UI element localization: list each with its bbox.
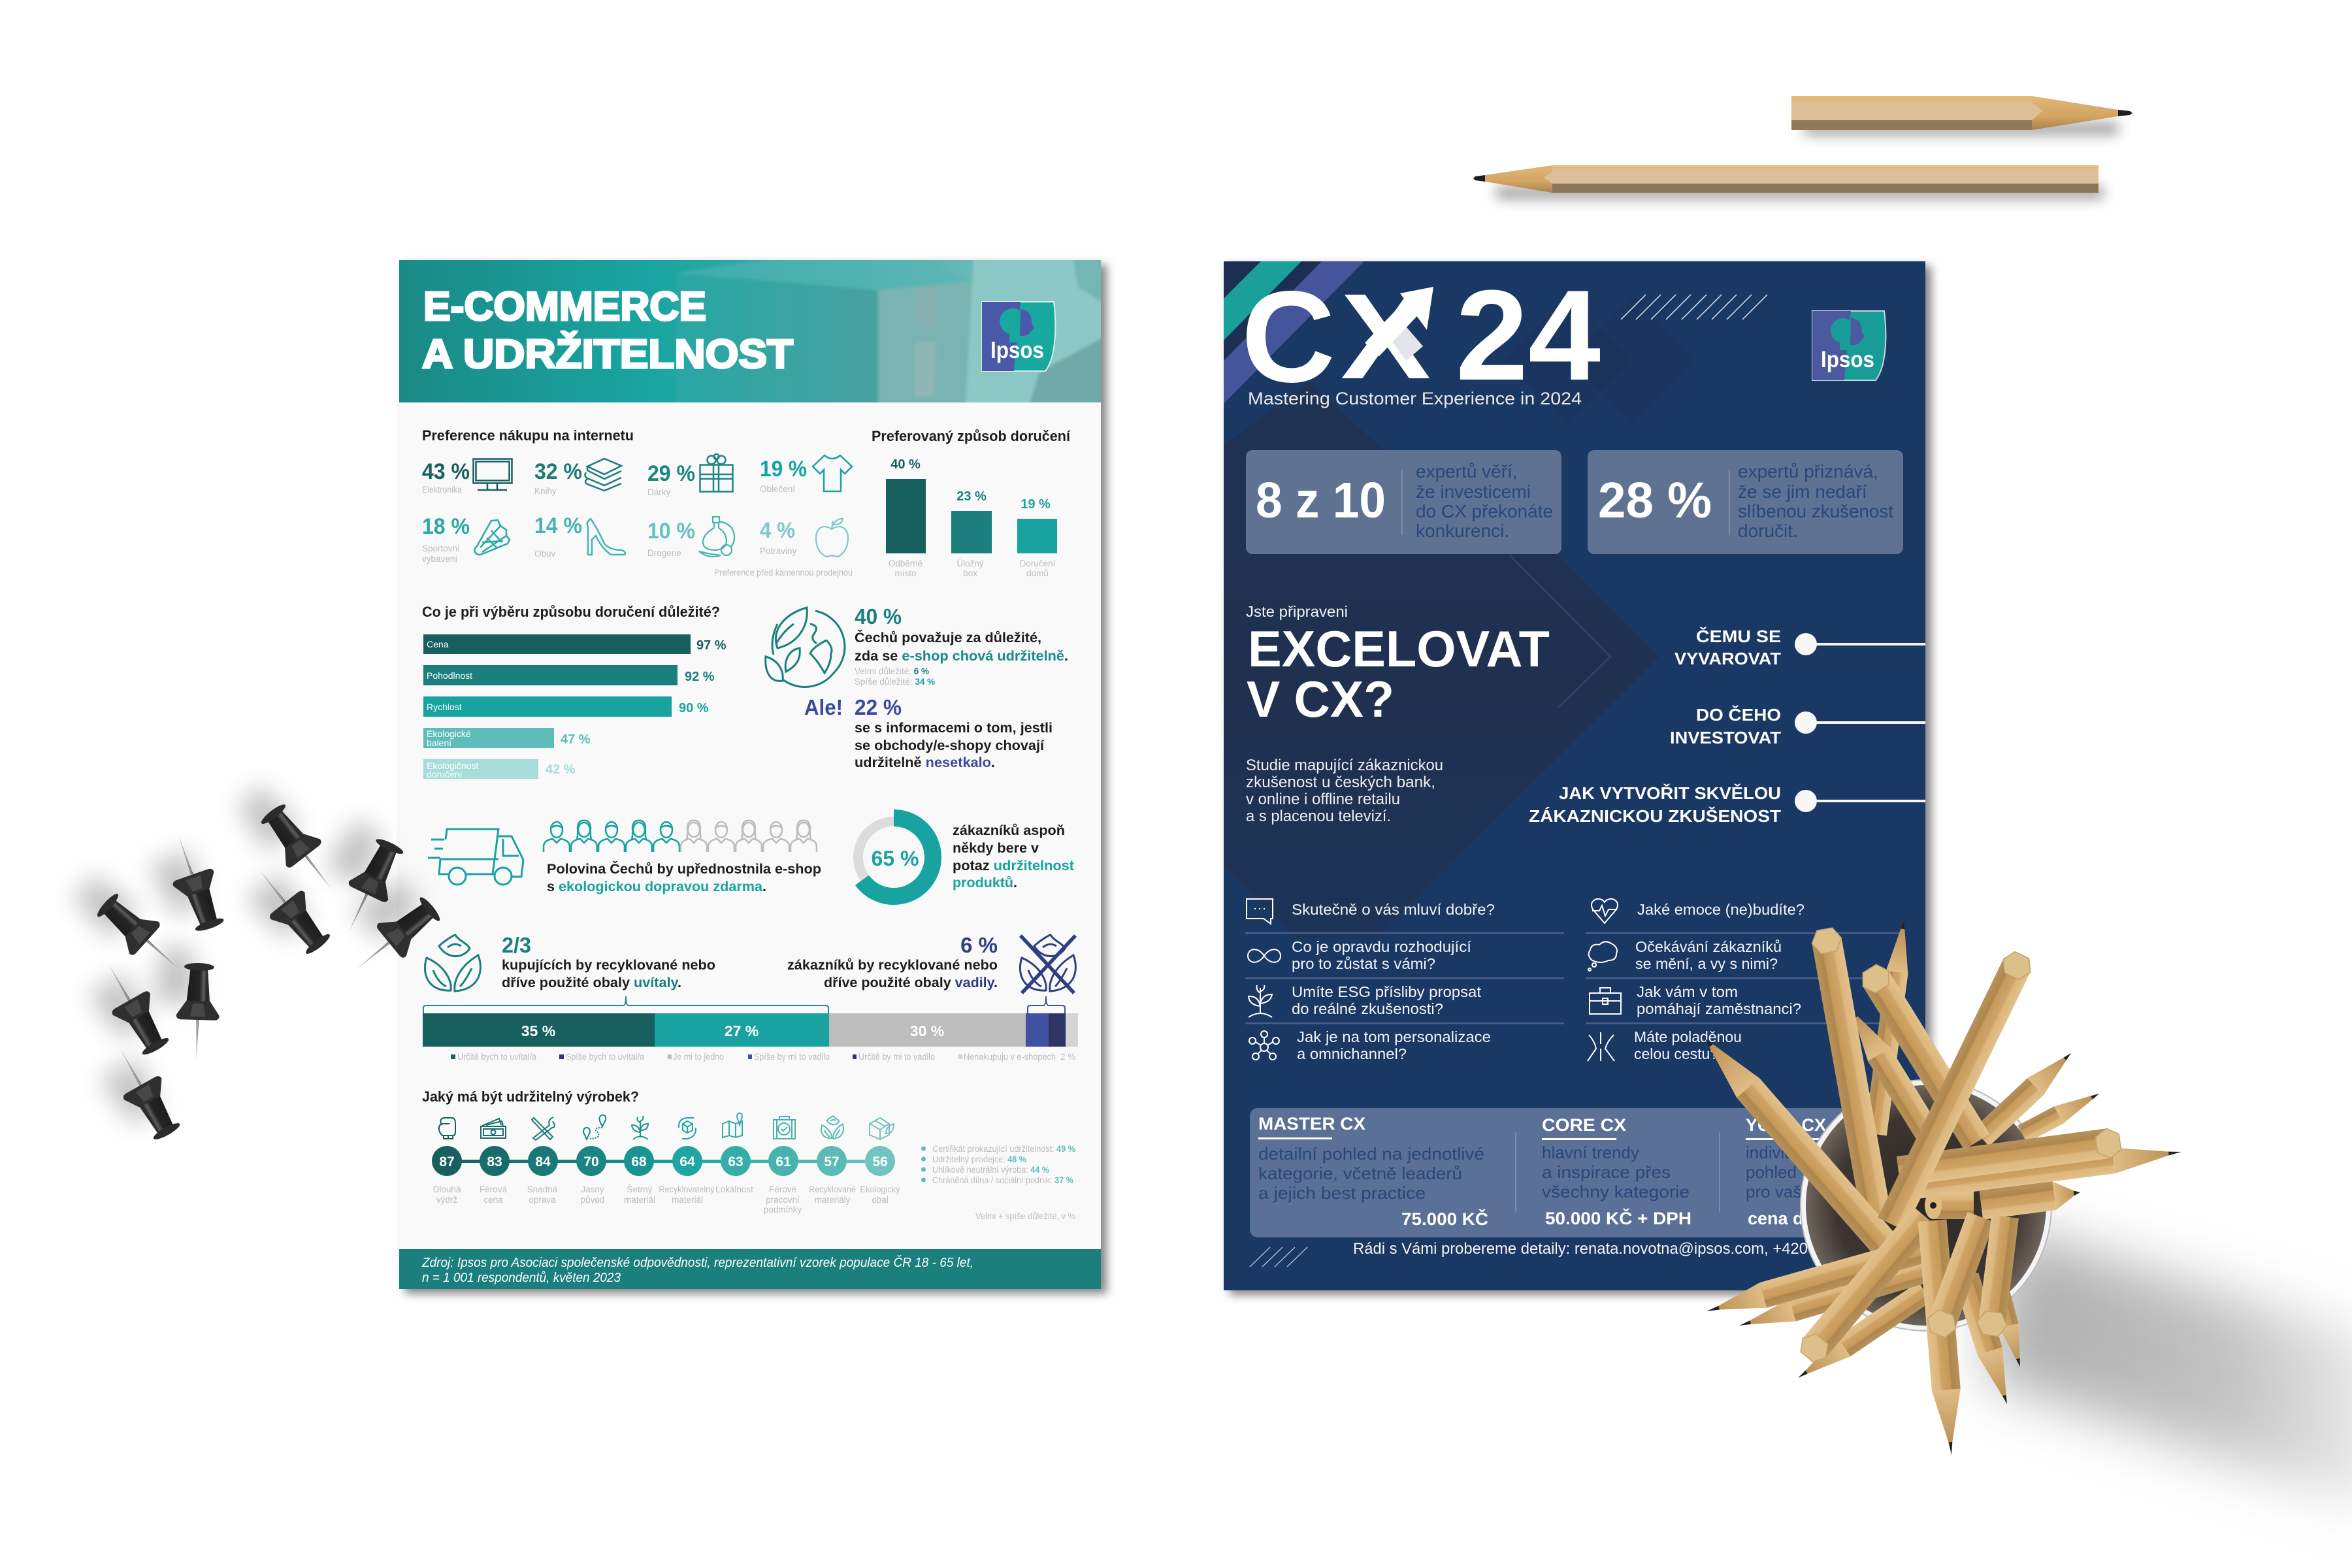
icon: crossed recycle [1020,935,1075,993]
timeline labels [433,1184,900,1215]
card: 8 z 10: konkurenci. [1416,521,1509,541]
icon: shuttlecock [474,520,510,555]
title: CX 24: C [1241,265,1335,410]
text block: polovina Čechů: s ekologickou dopravou zdarma . [547,879,766,894]
stat: elektronika [422,459,512,495]
legend: Určitě by mi to vadilo [858,1052,935,1062]
icon: map [723,1113,742,1137]
bar chart: způsob doručení: domů [1026,568,1049,578]
title: A UDRŽITELNOST [422,332,793,377]
donut chart: 65 % [855,818,933,896]
card: 8 z 10: do CX překonáte [1416,501,1553,521]
text block: zákazníků aspoň: zákazníků aspoň [953,823,1065,838]
timeline labels: oprava [529,1195,556,1205]
timeline: circles with values: 70 [583,1154,599,1169]
timeline: circles with values: 84 [535,1154,551,1169]
icon row: product attributes [439,1113,894,1140]
tier: core cx: všechny kategorie [1542,1182,1690,1201]
heading: excelovat v CX [1246,603,1550,728]
stat: potraviny: 4 % [760,518,795,543]
pin 4 [69,870,192,984]
note: velmi + spíše důležité: Velmi + spíše důležité, v % [975,1211,1075,1221]
question list: do reálné zkušenosti? [1292,1000,1443,1017]
stat: drogerie: Drogerie [647,548,681,558]
icon: high heel [587,519,625,555]
icon: gift [700,454,733,491]
bar chart: důležitost: Ekologičnost [427,760,478,771]
pencils in cup [1694,919,2183,1456]
stat: knihy: 32 % [534,459,582,484]
card: 8 z 10: 8 z 10 [1256,472,1386,529]
icon: thought cloud [1588,941,1617,971]
bar chart: způsob doručení: Doručení [1020,559,1056,568]
stat: drogerie [647,517,734,558]
title: CX 24 [1241,263,1601,410]
legend: Spíše by mi to vadilo [754,1052,830,1062]
stat: elektronika: 43 % [422,459,470,484]
note: preference před kamennou prodejnou: Preference před kamennou prodejnou [714,568,853,578]
legend: Je mi to jedno [673,1052,724,1062]
icon: road [1588,1032,1614,1061]
pin 2 [325,818,411,941]
question list: Máte poladěnou [1634,1028,1742,1045]
icon: truck [428,829,523,885]
question list: pro to zůstat s vámi? [1292,955,1435,972]
cup [1801,1080,2051,1331]
stat: elektronika: Elektronika [422,485,462,495]
icon: network [1249,1031,1279,1060]
text block: Ale! 22 %: Ale! [804,695,843,719]
stat: sportovní vybavení: 18 % [422,514,470,539]
tier: core cx: CORE CX [1542,1115,1626,1135]
question list: pomáhají zaměstnanci? [1637,1000,1801,1017]
timeline labels: materiál [672,1195,703,1205]
pencil: top long [1473,165,2104,199]
question list: a omnichannel? [1297,1045,1407,1062]
stacked bar chart: 30 % [910,1022,944,1039]
stat: sportovní vybavení: vybavení [422,554,457,564]
text block: polovina Čechů: Polovina Čechů by upřednostnila e-shop [547,861,821,877]
card: 28 %: že se jim nedaří [1738,482,1867,502]
bar chart: důležitost: Rychlost [427,702,462,712]
footer: source: Zdroj: Ipsos pro Asociaci společenské odpovědnosti, reprezentativní vzorek populace ČR 18 - 65 let, [421,1255,973,1270]
icon: recycle leaves [425,935,480,991]
bar chart: důležitost: 42 % [546,762,576,777]
bar chart: způsob doručení [886,457,1057,578]
tier: master cx: 75.000 KČ [1401,1209,1488,1229]
callout list: témata: ZÁKAZNICKOU ZKUŠENOST [1529,806,1781,826]
text block: zákazníků aspoň [953,823,1074,890]
text block: 40 % [855,604,1068,687]
text block: 2/3: kupujících by recyklované nebo [502,958,715,973]
donut chart: 65 %: 65 % [872,847,919,870]
bar chart: důležitost: 47 % [561,732,591,747]
text block: polovina Čechů [547,861,821,894]
list: další atributy: Udržitelný prodejce: 48 % [932,1154,1026,1164]
panel: right poster CX 24 [1224,261,1931,1295]
bar chart: důležitost: 97 % [696,638,727,653]
icon: route pins [583,1115,606,1139]
timeline labels: obal [872,1195,889,1205]
stat: knihy: Knihy [534,486,557,496]
list: další atributy: Chráněná dílna / sociální podnik: 37 % [932,1175,1073,1185]
card: 8 z 10: expertů věří, [1416,461,1518,482]
text block: studie: zkušenost u českých bank, [1246,774,1435,791]
tier: core cx [1542,1115,1691,1228]
logo: Ipsos: Ipsos [990,336,1044,363]
text block: Ale! 22 % [804,695,1053,770]
stat: oblečení: Oblečení [760,484,795,494]
stacked bar chart: 27 % [725,1022,759,1039]
icon group: ten people [544,821,817,852]
stat: potraviny: Potraviny [760,546,797,556]
cup with pencils [1694,919,2183,1456]
logo: Ipsos: Ipsos [1821,347,1874,372]
question list [1247,899,1805,1062]
bar chart: důležitost: 90 % [679,701,709,715]
stat: obuv: Obuv [534,549,556,559]
stat: sportovní vybavení: Sportovní [422,544,460,553]
question list: Jak je na tom personalizace [1297,1028,1491,1045]
timeline labels: Férové [769,1184,796,1194]
stat: obuv: 14 % [534,514,582,538]
slash lines bottom [1250,1247,1307,1267]
bar chart: důležitost: 92 % [685,670,715,684]
callout list: témata [1529,627,1925,826]
timeline labels: materiál [624,1195,655,1205]
footer: source: n = 1 001 respondentů, květen 2023 [422,1271,621,1285]
icon: briefcase [1590,988,1621,1014]
timeline labels: materiály [815,1195,851,1205]
heading: preferovaný způsob doručení: Preferovaný způsob doručení [872,428,1071,444]
text block: zákazníků aspoň: potaz udržitelnost [953,858,1074,874]
timeline labels: Šetrný [627,1184,653,1194]
icon: infinity [1248,949,1281,962]
icon: speech bubble [1247,899,1273,924]
icon: plant [632,1116,648,1139]
stat: obuv [534,514,625,559]
text block: 2/3: dříve použité obaly uvítaly. [502,975,681,990]
bar chart: způsob doručení: Úložný [956,559,984,568]
tier: core cx: a inspirace přes [1542,1162,1671,1182]
heading: excelovat v CX: Jste připraveni [1246,603,1348,620]
icon: books [585,459,621,491]
tier: your cx: YOUR CX [1746,1115,1826,1135]
heading: preference nákupu: Preference nákupu na internetu [422,427,634,444]
cup shadow [1986,1228,2352,1509]
timeline labels: původ [581,1195,604,1205]
pin 9 [100,1039,188,1145]
stat: drogerie: 10 % [647,519,695,544]
pin 8 [88,954,176,1060]
icon: heart pulse [1592,899,1618,923]
stat: dárky: 29 % [647,461,695,486]
list dividers [1245,932,1903,1024]
text block: 40 %: 40 % [855,604,902,629]
callout list: témata: ČEMU SE [1696,627,1781,646]
heading: co je důležité: Co je při výběru způsobu doručení důležité? [422,604,720,620]
text block: 6 %: 6 % [960,933,998,957]
bar chart: způsob doručení: 19 % [1021,497,1051,512]
timeline: circles with values: 57 [824,1154,840,1169]
push pins [69,782,446,1145]
legend: Určitě bych to uvítal/a [457,1052,536,1062]
text block: Ale! 22 %: se obchody/e-shopy chovají [855,738,1045,753]
timeline: circles with values: 83 [487,1154,502,1169]
tier: core cx: hlavní trendy [1542,1143,1639,1162]
timeline labels: pracovní [766,1195,800,1205]
title: CX 24: 24 [1456,263,1601,407]
timeline: circles with values: 68 [631,1154,647,1169]
bar chart: způsob doručení: 40 % [890,457,921,472]
timeline: circles with values: 63 [728,1154,743,1169]
stat: dárky [647,454,733,497]
question list: Jaké emoce (ne)budíte? [1637,901,1805,918]
icon: circular box [679,1118,696,1139]
footer: source [399,1249,1101,1289]
list: další atributy: Certifikát prokazující udržitelnost: 49 % [932,1144,1075,1154]
text block: 6 % [787,933,998,990]
stacked bar chart: 35 % [521,1022,555,1039]
stat: dárky: Dárky [647,487,671,497]
tier: your cx: cena dohodou [1748,1209,1869,1228]
card: 28 %: 28 % [1598,472,1712,529]
icon: boxing glove [439,1118,455,1139]
bar chart: způsob doručení: místo [894,568,917,578]
timeline labels: Férová [480,1184,507,1194]
stat: potraviny [760,518,848,557]
stat: knihy [534,459,621,496]
text block: 40 %: Velmi důležité: 6 % [855,666,929,676]
text block: 40 %: Čechů považuje za důležité, [855,630,1041,645]
icon: perfume [699,517,734,557]
tier: master cx [1258,1114,1488,1229]
tier: master cx: detailní pohled na jednotlivé [1258,1144,1484,1164]
text block: studie: a s placenou televizí. [1246,808,1391,825]
timeline labels: výdrž [436,1195,457,1205]
tier: core cx: 50.000 KČ + DPH [1545,1208,1691,1228]
stat: oblečení [760,455,852,494]
timeline labels: podmínky [764,1205,802,1215]
timeline labels: Ekologický [860,1184,900,1194]
bar chart: důležitost: Ekologické [427,728,471,739]
timeline labels: Recyklovatelný [659,1184,715,1194]
text block: 40 %: zda se e-shop chová udržitelně . [855,649,1068,664]
icon: recycle small [821,1116,843,1139]
logo: Ipsos [1812,311,1886,380]
header banner [399,260,1101,402]
timeline: circles with values: 56 [872,1154,888,1169]
icon: t-shirt [813,455,852,491]
icon: tools [532,1117,555,1140]
card: 28 %: doručit. [1738,521,1798,541]
bar chart: důležitost: Pohodlnost [427,670,472,681]
tier: your cx: pohled [1746,1162,1797,1182]
pin 5 [150,828,231,936]
text block: 6 %: zákazníků by recyklované nebo [787,958,998,973]
tier: your cx [1746,1115,1869,1228]
text block: Ale! 22 %: se s informacemi o tom, jestli [855,721,1053,736]
pin 1 [233,782,348,902]
heading: excelovat v CX: V CX? [1247,670,1394,728]
title: E-COMMERCE [423,284,706,329]
tier: master cx: a jejich best practice [1258,1183,1426,1203]
icon: money [481,1119,506,1138]
legend [451,1052,1075,1062]
timeline: circles with values: 87 [439,1154,455,1169]
text block: 6 %: dříve použité obaly vadily. [824,975,998,990]
card: 8 z 10 [1246,450,1561,554]
pencil: top short [1791,96,2132,135]
callout list: témata: INVESTOVAT [1670,728,1781,747]
timeline labels: cena [483,1195,503,1205]
pin 3 [344,874,446,985]
icon: case with seal [774,1117,795,1139]
question list: Jak vám v tom [1637,983,1738,1000]
text block: 2/3 [502,933,715,990]
bar chart: důležitost: doručení [427,769,463,779]
timeline labels: Dlouhá [433,1184,461,1194]
timeline: circles with values: 61 [776,1154,791,1169]
question list: Umíte ESG přísliby propsat [1292,983,1482,1000]
icon: earth with leaves [766,608,845,687]
title [422,284,793,377]
question list: Očekávání zákazníků [1635,938,1782,955]
icon: box leaf [870,1118,894,1139]
pin 6 [242,857,337,960]
timeline: circles with values [432,1146,895,1176]
card: 28 %: expertů přiznává, [1738,461,1878,482]
bar chart: způsob doručení: 23 % [956,489,987,504]
bar chart: způsob doručení: box [963,568,977,578]
text block: Ale! 22 %: 22 % [855,695,902,719]
stacked bar chart [423,1013,1078,1047]
stat: oblečení: 19 % [760,457,807,482]
bar chart: důležitost: balení [427,738,451,748]
icon: plant [1249,985,1272,1017]
bar chart: způsob doručení: Odběrné [889,559,923,568]
list: další atributy [921,1144,1075,1185]
text block: studie [1246,757,1443,825]
background chevrons [1224,262,1697,938]
tier: master cx: MASTER CX [1258,1114,1365,1134]
legend: Spíše bych to uvítal/a [566,1052,644,1062]
pin 7 [154,947,221,1062]
bar chart: důležitost [423,634,727,779]
slash lines top [1621,295,1767,319]
card: 8 z 10: že investicemi [1416,482,1531,502]
timeline labels: Recyklované [809,1184,856,1194]
stat: sportovní vybavení [422,514,510,564]
card: 28 %: slíbenou zkušenost [1738,501,1893,521]
question list: Skutečně o vás mluví dobře? [1292,901,1495,918]
legend: 2 % [1060,1052,1075,1062]
callout list: témata: JAK VYTVOŘIT SKVĚLOU [1559,783,1781,803]
list: další atributy: Uhlíkově neutrální výroba: 44 % [932,1165,1049,1175]
text block: studie: Studie mapující zákaznickou [1246,757,1443,774]
panel: left poster e-commerce [399,248,1111,1294]
question list: se mění, a vy s nimi? [1635,955,1778,972]
tier: your cx: pro vaši [1746,1182,1805,1201]
contact line: Rádi s Vámi probereme detaily: renata.novotna@ipsos.com, +420 [1353,1240,1808,1258]
bar chart: důležitost: Cena [427,639,449,649]
question list: Co je opravdu rozhodující [1292,938,1472,955]
text block: Ale! 22 %: udržitelně nesetkalo. [855,755,995,770]
icon: tv [473,459,512,490]
timeline labels: Jasný [581,1184,604,1194]
text block: zákazníků aspoň: někdy bere v [953,841,1039,856]
text block: 2/3: 2/3 [502,933,531,957]
callout list: témata: VYVAROVAT [1674,649,1781,668]
subtitle: Mastering Customer Experience in 2024 [1248,389,1582,408]
text block: zákazníků aspoň: produktů. [953,875,1017,890]
question list: celou cestu? [1634,1045,1718,1062]
heading: jaký má být udržitelný výrobek: Jaký má být udržitelný výrobek? [422,1088,639,1105]
timeline: circles with values: 64 [679,1154,695,1169]
callout list: témata: DO ČEHO [1696,705,1781,725]
brackets [423,996,1065,1013]
panel: pricing card [1250,1108,1903,1237]
card: 28 % [1588,450,1903,554]
logo: Ipsos [982,302,1055,371]
tier: your cx: individuální [1746,1143,1831,1162]
title: CX 24: X [1341,269,1431,404]
text block: studie: v online i offline retailu [1246,791,1400,808]
timeline labels: Lokálnost [715,1184,753,1194]
legend: Nenakupuju v e-shopech [964,1052,1056,1062]
icon: apple [816,519,848,557]
timeline labels: Snadná [527,1184,558,1194]
text block: 40 %: Spíše důležité: 34 % [855,677,935,687]
tier: master cx: kategorie, včetně leaderů [1258,1164,1462,1183]
stripes [1224,261,1364,404]
heading: excelovat v CX: EXCELOVAT [1248,620,1550,678]
